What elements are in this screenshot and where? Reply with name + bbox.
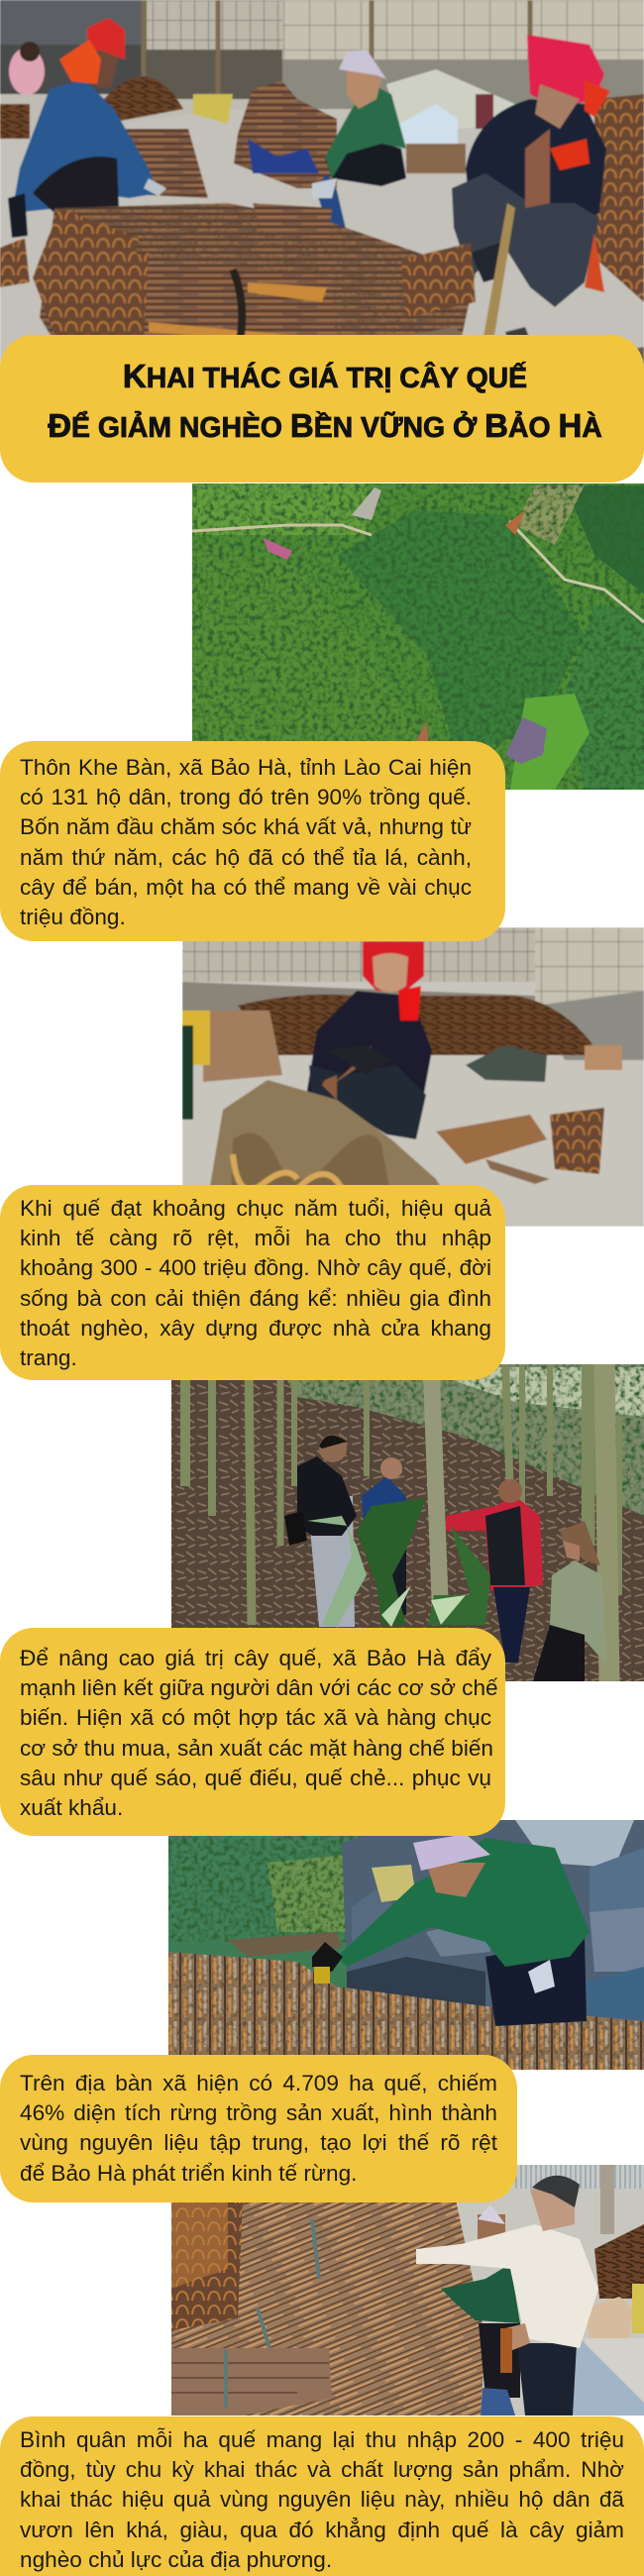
- background heap: [238, 995, 599, 1055]
- paragraph: xuất khẩu.: [20, 1795, 123, 1820]
- seated woman: [307, 941, 432, 1139]
- paragraph: 46% diện tích rừng trồng sản xuất, hình thành: [20, 2100, 497, 2125]
- paragraph: vươn lên khá, giàu, qua đó khẳng định quế là cây giảm: [20, 2518, 624, 2542]
- paragraph: có 131 hộ dân, trong đó trên 90% trồng quế.: [20, 785, 472, 809]
- right woman: [452, 35, 610, 362]
- paragraph: mạnh liên kết giữa người dân với các cơ sở chế: [20, 1675, 498, 1700]
- heading: [48, 358, 602, 444]
- tree trunks: [185, 1364, 619, 1681]
- paragraph: Để nâng cao giá trị cây quế, xã Bảo Hà đẩy: [20, 1646, 491, 1670]
- photo: aerial view of cinnamon forest: [192, 483, 644, 790]
- man in red jacket: [446, 1479, 543, 1663]
- back right pile and box: [585, 2224, 644, 2338]
- text panel: thu nhập bình quân: [0, 2416, 644, 2576]
- warehouse wall: [0, 0, 644, 109]
- paragraph: thoát nghèo, xây dựng được nhà cửa khang: [20, 1316, 491, 1341]
- paragraph: sống bà con cải thiện đáng kể: nhiều gia đình: [20, 1286, 491, 1311]
- concrete floor: [0, 109, 644, 416]
- green hillside: [168, 1833, 416, 1942]
- main cinnamon pile: [171, 2200, 485, 2415]
- log: [228, 1932, 342, 1957]
- heading: ĐỂ GIẢM NGHÈO BỀN VỮNG Ở BẢO HÀ: [48, 407, 602, 444]
- cinnamon rolls field: [168, 1952, 644, 2070]
- paragraph: [20, 1196, 491, 1370]
- photo: woman measuring moisture of cinnamon rolls: [168, 1820, 644, 2070]
- blue sacks: [342, 1820, 644, 2031]
- paragraph: để Bảo Hà phát triển kinh tế rừng.: [20, 2161, 357, 2186]
- text panel: vùng nguyên liệu: [0, 2055, 517, 2202]
- photo: officers and farmers inspecting cinnamon branches in forest: [171, 1364, 644, 1681]
- paragraph: vùng nguyên liệu tập trung, tạo lợi thế rõ rệt: [20, 2130, 497, 2155]
- paragraph: cơ sở thu mua, sản xuất các mặt hàng chế biến: [20, 1736, 493, 1761]
- man in white sweater: [416, 2176, 598, 2415]
- paragraph: sâu như quế sáo, quế điếu, quế chẻ... phục vụ: [20, 1766, 491, 1790]
- woman in green jacket: [312, 1834, 590, 2026]
- text panel: hiệu quả kinh tế: [0, 1185, 505, 1380]
- woman in green: [441, 2204, 520, 2415]
- heading: KHAI THÁC GIÁ TRỊ CÂY QUẾ: [123, 358, 527, 394]
- upper slope: [277, 1364, 644, 1516]
- man in black jacket: [284, 1435, 357, 1627]
- paragraph: năm thứ năm, các hộ đã có thể tỉa lá, cành,: [20, 845, 472, 870]
- wall and floor: [515, 2165, 644, 2415]
- middle woman: [248, 50, 406, 238]
- man in blue jacket: [362, 1457, 406, 1615]
- background woman in pink: [9, 42, 45, 95]
- left stack: [182, 1011, 282, 1120]
- paragraph: triệu đồng.: [20, 905, 126, 929]
- big cinnamon bundles: [0, 203, 644, 416]
- paragraph: trang.: [20, 1345, 77, 1370]
- paragraph: đồng, tùy chu kỳ khai thác và chất lượng sản phẩm. Nhờ: [20, 2457, 624, 2482]
- paragraph: [20, 1646, 498, 1820]
- paragraph: khai thác hiệu quả vùng nguyên liệu này, nhiều hộ dân đã: [20, 2487, 624, 2512]
- paragraph: cây để bán, một ha có thể mang về vài chục: [20, 875, 472, 900]
- title banner: [0, 335, 644, 483]
- paragraph: Trên địa bàn xã hiện có 4.709 ha quế, chiếm: [20, 2071, 497, 2095]
- warehouse walls: [182, 927, 644, 1060]
- paragraph: biến. Hiện xã có một hợp tác xã và hàng chục: [20, 1705, 491, 1730]
- left woman: [8, 18, 166, 238]
- photo: man and woman inspecting cinnamon bundles: [171, 2165, 644, 2415]
- woman in olive jacket: [533, 1521, 606, 1681]
- text panel: liên kết chế biến: [0, 1628, 505, 1836]
- big bark rolls: [203, 1080, 466, 1227]
- paragraph: [20, 755, 472, 929]
- paragraph: [20, 2071, 497, 2186]
- paragraph: Bốn năm đầu chăm sóc khá vất vả, nhưng từ: [20, 814, 472, 839]
- paragraph: kinh tế càng rõ rệt, mỗi ha cho thu nhập: [20, 1226, 491, 1250]
- paragraph: [20, 2427, 624, 2572]
- paragraph: Bình quân mỗi ha quế mang lại thu nhập 200 - 400 triệu: [20, 2427, 624, 2452]
- bundle behind left woman: [114, 129, 208, 198]
- paragraph: khoảng 300 - 400 triệu đồng. Nhờ cây quế, đời: [20, 1255, 491, 1280]
- tree canopy masses: [192, 483, 644, 790]
- text panel: Thôn Khe Bàn: [0, 741, 505, 941]
- tarp stack: [386, 69, 515, 173]
- paragraph: Khi quế đạt khoảng chục năm tuổi, hiệu quả: [20, 1196, 491, 1221]
- bag and pile: [436, 1045, 622, 1184]
- pond: [505, 694, 590, 790]
- background piles: [0, 76, 644, 302]
- leafy branches: [307, 1498, 490, 1627]
- roads and roofs: [192, 487, 644, 753]
- paragraph: Thôn Khe Bàn, xã Bảo Hà, tỉnh Lào Cai hiện: [20, 755, 472, 780]
- paragraph: nghèo chủ lực của địa phương.: [20, 2547, 332, 2572]
- photo: workers bundling cinnamon bark: [0, 0, 644, 369]
- photo: smiling woman with cinnamon bark: [182, 927, 644, 1227]
